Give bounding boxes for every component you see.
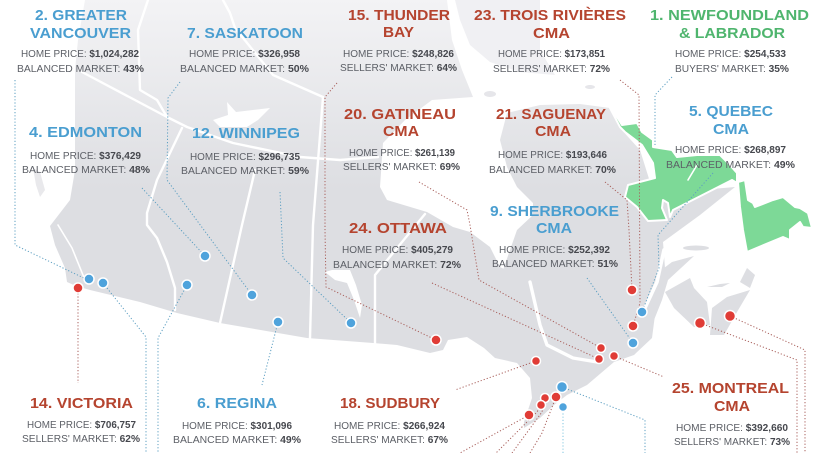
panel: 6. Regina — [173, 395, 301, 446]
panel: 12. Winnipeg: HOME PRICE: $296,735 — [190, 152, 300, 163]
panel: 4. Edmonton: HOME PRICE: $376,429 — [30, 151, 141, 162]
panel: 15. Thunder Bay: SELLERS' MARKET: 64% — [340, 63, 457, 74]
panel: 25. Montreal CMA: HOME PRICE: $392,660 — [676, 423, 788, 434]
panel: 12. Winnipeg: 12. WINNIPEG — [192, 125, 300, 142]
panel: 1. Newfoundland and Labrador: HOME PRICE: $254,533 — [675, 49, 786, 60]
panel: 9. Sherbrooke CMA: CMA — [536, 220, 572, 237]
panel: 7. Saskatoon: 7. SASKATOON — [187, 25, 303, 42]
panel: 25. Montreal CMA: SELLERS' MARKET: 73% — [674, 437, 790, 448]
panel: 6. Regina: HOME PRICE: $301,096 — [182, 421, 292, 432]
panel: 2. Greater Vancouver: 2. GREATER — [35, 7, 127, 24]
panel: 9. Sherbrooke CMA: 9. SHERBROOKE — [490, 203, 619, 220]
panel: 12. Winnipeg — [181, 125, 309, 177]
panel: 7. Saskatoon — [180, 25, 309, 75]
provincial borders — [58, 0, 664, 362]
panel: 1. Newfoundland and Labrador: BUYERS' MARKET: 35% — [675, 64, 789, 75]
lakes — [213, 102, 362, 318]
panel: 15. Thunder Bay: 15. THUNDER — [348, 7, 450, 24]
panel: 20. Gatineau CMA: HOME PRICE: $261,139 — [349, 148, 455, 159]
panel: 5. Quebec CMA: HOME PRICE: $268,897 — [675, 145, 786, 156]
panel: 6. Regina: BALANCED MARKET: 49% — [173, 435, 301, 446]
panel: 23. Trois Rivieres CMA: SELLERS' MARKET: 72% — [493, 64, 610, 75]
panel: 21. Saguenay CMA: HOME PRICE: $193,646 — [498, 150, 607, 161]
panel: 2. Greater Vancouver — [17, 7, 144, 75]
maritime provinces — [665, 268, 755, 335]
panel: 5. Quebec CMA: CMA — [713, 121, 749, 138]
location markers — [73, 251, 736, 420]
panel: 2. Greater Vancouver: VANCOUVER — [30, 25, 131, 42]
panel: 25. Montreal CMA — [672, 380, 790, 448]
panel: 18. Sudbury: HOME PRICE: $266,924 — [334, 421, 445, 432]
panel: 4. Edmonton: 4. EDMONTON — [29, 124, 142, 141]
panel: 15. Thunder Bay: HOME PRICE: $248,826 — [343, 49, 454, 60]
panel: 21. Saguenay CMA — [489, 106, 616, 176]
panel: 14. Victoria: 14. VICTORIA — [30, 395, 133, 412]
panel: 7. Saskatoon: HOME PRICE: $326,958 — [189, 49, 300, 60]
panel: 2. Greater Vancouver: BALANCED MARKET: 43% — [17, 64, 144, 75]
panel: 1. Newfoundland and Labrador — [650, 7, 809, 75]
panel: 1. Newfoundland and Labrador: & LABRADOR — [679, 25, 785, 42]
panel: 5. Quebec CMA: BALANCED MARKET: 49% — [666, 160, 795, 171]
panel: 12. Winnipeg: BALANCED MARKET: 59% — [181, 166, 309, 177]
panel: 23. Trois Rivieres CMA: HOME PRICE: $173,851 — [498, 49, 605, 60]
panel: 5. Quebec CMA — [666, 103, 795, 171]
panel: 23. Trois Rivieres CMA: 23. TROIS RIVIÈRES — [474, 7, 626, 24]
panel: 9. Sherbrooke CMA: HOME PRICE: $252,392 — [499, 245, 610, 256]
panel: 25. Montreal CMA: CMA — [714, 398, 750, 415]
panel: 25. Montreal CMA: 25. MONTREAL — [672, 380, 789, 397]
panel: 18. Sudbury — [331, 395, 448, 446]
panel: 24. Ottawa: BALANCED MARKET: 72% — [333, 260, 461, 271]
panel: 20. Gatineau CMA: 20. GATINEAU — [344, 106, 456, 123]
panel: 24. Ottawa — [333, 220, 461, 271]
panel: 1. Newfoundland and Labrador: 1. NEWFOUNDLAND — [650, 7, 809, 24]
panel: 4. Edmonton: BALANCED MARKET: 48% — [22, 165, 150, 176]
panel: 20. Gatineau CMA: CMA — [383, 123, 419, 140]
panel: 5. Quebec CMA: 5. QUEBEC — [689, 103, 773, 120]
Newfoundland and Labrador in green — [610, 108, 812, 252]
panel: 24. Ottawa: 24. OTTAWA — [349, 220, 447, 237]
panel: 14. Victoria: HOME PRICE: $706,757 — [27, 420, 136, 431]
panel: 9. Sherbrooke CMA — [490, 203, 619, 270]
panel: 14. Victoria: SELLERS' MARKET: 62% — [22, 434, 140, 445]
panel: 21. Saguenay CMA: CMA — [535, 123, 571, 140]
panel: 23. Trois Rivieres CMA — [474, 7, 626, 75]
panel: 9. Sherbrooke CMA: BALANCED MARKET: 51% — [492, 259, 618, 270]
panel: 20. Gatineau CMA: SELLERS' MARKET: 69% — [343, 162, 460, 173]
panel: 20. Gatineau CMA — [343, 106, 460, 173]
panel: 15. Thunder Bay — [340, 7, 457, 74]
panel: 24. Ottawa: HOME PRICE: $405,279 — [342, 245, 453, 256]
panel: 14. Victoria — [22, 395, 140, 445]
panel: 2. Greater Vancouver: HOME PRICE: $1,024,282 — [21, 49, 139, 60]
panel: 7. Saskatoon: BALANCED MARKET: 50% — [180, 64, 309, 75]
panel: 6. Regina: 6. REGINA — [197, 395, 277, 412]
panel: 18. Sudbury: SELLERS' MARKET: 67% — [331, 435, 448, 446]
panel: 15. Thunder Bay: BAY — [383, 24, 414, 41]
panel: 4. Edmonton — [22, 124, 150, 176]
panel: 21. Saguenay CMA: 21. SAGUENAY — [496, 106, 606, 123]
panel: 21. Saguenay CMA: BALANCED MARKET: 70% — [489, 165, 616, 176]
panel: 18. Sudbury: 18. SUDBURY — [340, 395, 440, 412]
panel: 23. Trois Rivieres CMA: CMA — [533, 25, 570, 42]
